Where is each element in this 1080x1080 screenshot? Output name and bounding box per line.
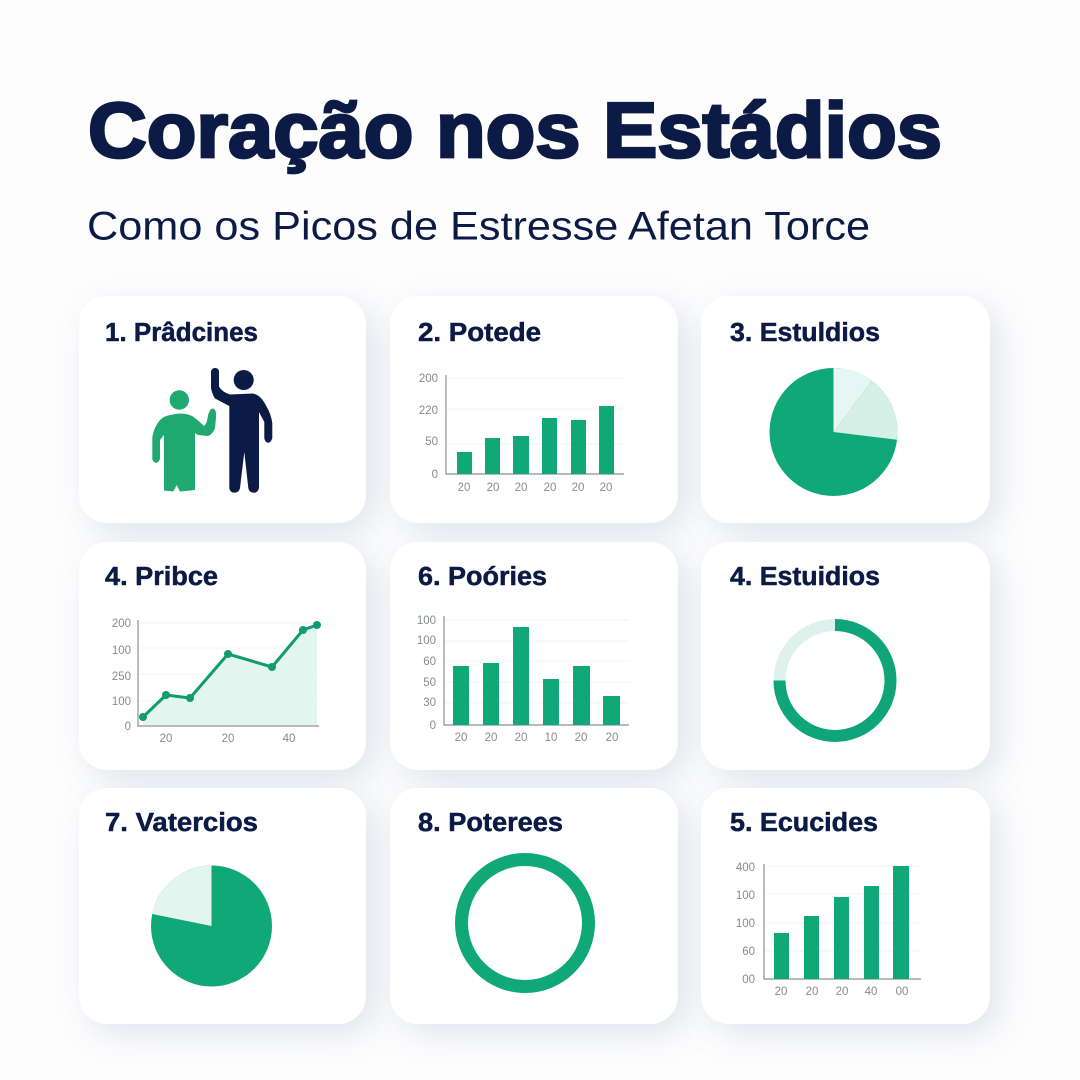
bar chart: 00	[896, 986, 908, 998]
panel: 1 people	[79, 296, 366, 523]
bar chart: 10	[545, 732, 557, 744]
bar chart: 100	[417, 635, 436, 647]
line chart: 100	[112, 696, 131, 708]
bar chart: 0	[430, 720, 436, 732]
panel: 4 donut chart	[701, 542, 990, 770]
bar chart: 220	[419, 405, 438, 417]
heading 8: 8. Poterees	[418, 809, 563, 837]
donut chart	[780, 625, 891, 736]
panel: 8 ring	[390, 788, 678, 1024]
bar chart: 50	[423, 677, 436, 689]
bar chart: 20	[515, 732, 527, 744]
bar chart: 00	[742, 974, 755, 986]
heading 7: 7. Vatercios	[105, 809, 258, 837]
panel: 5 bar chart	[701, 788, 990, 1024]
bar chart: 20	[515, 482, 527, 494]
bar chart: 20	[572, 482, 584, 494]
pie chart	[151, 866, 272, 986]
heading 2: 2. Potede	[418, 319, 541, 347]
line chart: 200	[112, 618, 131, 630]
heading 1: 1. Prâdcines	[105, 319, 258, 347]
bar chart: 20	[485, 732, 497, 744]
heading 3: 3. Estuldios	[730, 319, 880, 347]
bar chart: 20	[836, 986, 848, 998]
bar chart: 100	[417, 615, 436, 627]
bar chart: 40	[865, 986, 877, 998]
bar chart: 0	[432, 469, 438, 481]
bar chart: 100	[736, 918, 755, 930]
bar chart: 20	[455, 732, 467, 744]
bar chart: 60	[423, 656, 436, 668]
bar chart: 20	[487, 482, 499, 494]
bar chart: 20	[806, 986, 818, 998]
icon: navy person	[211, 368, 272, 493]
heading 4 estudios: 4. Estuidios	[730, 563, 880, 591]
panel: 6 bar chart	[390, 542, 678, 770]
panel: 4 line chart	[79, 542, 366, 770]
bar chart: 100	[736, 890, 755, 902]
panel: 2 bar chart	[390, 296, 678, 523]
panel: 3 pie chart	[701, 296, 990, 523]
bar chart: 30	[423, 697, 436, 709]
bar chart: 200	[419, 373, 438, 385]
bar chart: 60	[742, 946, 755, 958]
heading 4: 4. Pribce	[105, 563, 218, 591]
title: Coração nos Estádios	[88, 86, 942, 174]
bar chart: 20	[606, 732, 618, 744]
line chart: 100	[112, 645, 131, 657]
ring chart	[462, 860, 588, 986]
bar chart: 20	[458, 482, 470, 494]
panel: 7 pie chart	[79, 788, 366, 1024]
bar chart	[419, 373, 624, 494]
bar chart: 20	[600, 482, 612, 494]
icon: green person	[152, 390, 216, 492]
bar chart: 20	[575, 732, 587, 744]
line chart: 20	[160, 733, 172, 745]
bar chart: 20	[775, 986, 787, 998]
bar chart: 20	[544, 482, 556, 494]
bar chart: 50	[425, 436, 438, 448]
heading 6: 6. Poóries	[418, 563, 547, 591]
line chart: 0	[125, 721, 131, 733]
line chart: 40	[283, 733, 295, 745]
pie chart	[770, 368, 898, 496]
line chart	[112, 618, 321, 745]
heading 5: 5. Ecucides	[730, 809, 878, 837]
bar chart	[736, 862, 921, 998]
line chart: 20	[222, 733, 234, 745]
line chart: 250	[112, 671, 131, 683]
bar chart	[417, 615, 629, 744]
subtitle: Como os Picos de Estresse Afetan Torce	[87, 204, 870, 248]
bar chart: 400	[736, 862, 755, 874]
